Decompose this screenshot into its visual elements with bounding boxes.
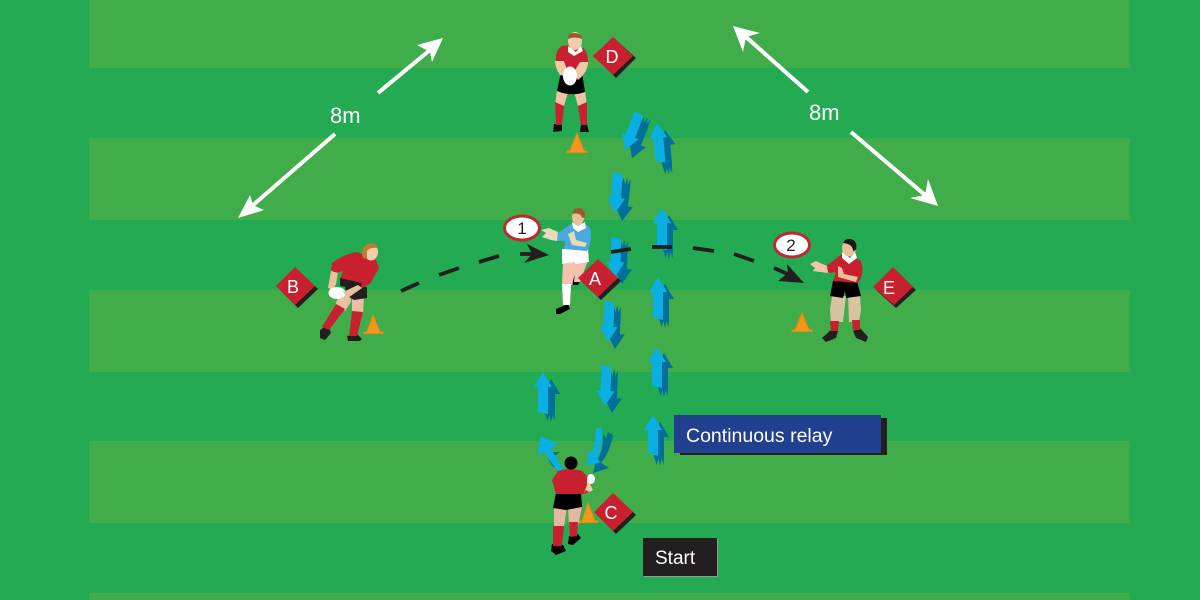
player E bbox=[810, 239, 868, 342]
right 8m distance arrow: 8m bbox=[809, 100, 840, 125]
curved relay arrows at player C bbox=[537, 428, 613, 473]
passing arrow from A to E bbox=[611, 247, 804, 283]
start label bbox=[643, 538, 718, 577]
cone near D bbox=[567, 133, 587, 152]
call out 2: 2 bbox=[786, 236, 796, 255]
player B bbox=[320, 244, 379, 341]
diamond B: B bbox=[287, 277, 299, 297]
start label: Start bbox=[655, 548, 696, 569]
continuous relay label bbox=[674, 415, 887, 455]
diamond E bbox=[873, 267, 916, 308]
diamond E: E bbox=[883, 278, 895, 298]
left 8m distance arrow: 8m bbox=[330, 103, 361, 128]
relay run arrows going up bbox=[534, 122, 678, 466]
call out 1 bbox=[504, 216, 540, 240]
relay run arrows going down bbox=[596, 109, 656, 413]
passing arrow from B to A bbox=[401, 244, 549, 291]
right 8m distance arrow bbox=[733, 26, 938, 206]
cone near E bbox=[792, 313, 812, 332]
diamond C: C bbox=[604, 503, 618, 523]
diamond A bbox=[578, 259, 621, 300]
player A bbox=[541, 208, 591, 314]
call out 1: 1 bbox=[517, 219, 527, 238]
diamond C bbox=[594, 493, 636, 534]
cone near C bbox=[579, 503, 598, 522]
call out 2 bbox=[774, 233, 810, 257]
player C bbox=[551, 456, 595, 555]
left 8m distance arrow bbox=[238, 38, 443, 218]
cone near B bbox=[364, 315, 383, 334]
diamond B bbox=[276, 267, 318, 308]
player D bbox=[553, 32, 589, 132]
diamond A: A bbox=[589, 269, 601, 289]
diamond D bbox=[593, 37, 636, 78]
diamond D: D bbox=[606, 47, 618, 67]
continuous relay label: Continuous relay bbox=[686, 425, 833, 447]
